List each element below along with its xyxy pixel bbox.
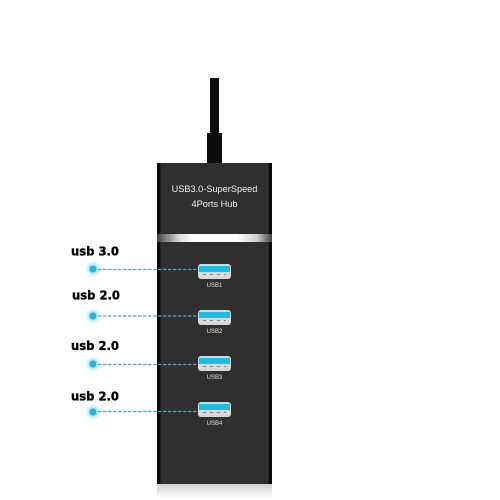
port 2 [198, 310, 231, 335]
port 3: USB3 [207, 375, 223, 381]
heading: hub name [172, 184, 257, 209]
heading: hub name: USB3.0-SuperSpeed [172, 184, 257, 194]
callout: usb 3.0 port 1: usb 3.0 [71, 244, 119, 258]
callout: usb 3.0 port 1 [71, 244, 198, 278]
port 3 [198, 356, 231, 381]
callout: usb 2.0 port 3: usb 2.0 [71, 339, 119, 353]
cable [207, 78, 222, 164]
callout: usb 2.0 port 2: usb 2.0 [72, 288, 120, 302]
port 1 [198, 264, 231, 289]
heading: hub name: 4Ports Hub [192, 199, 237, 209]
callout: usb 2.0 port 2 [72, 288, 198, 325]
port 4 [198, 402, 231, 427]
callout: usb 2.0 port 3 [71, 339, 198, 373]
hub body [157, 163, 272, 498]
port 2: USB2 [207, 329, 223, 335]
silver band [157, 234, 272, 242]
callout: usb 2.0 port 4: usb 2.0 [71, 390, 119, 404]
port 4: USB4 [207, 421, 223, 427]
callout: usb 2.0 port 4 [71, 390, 198, 421]
port 1: USB1 [207, 283, 223, 289]
